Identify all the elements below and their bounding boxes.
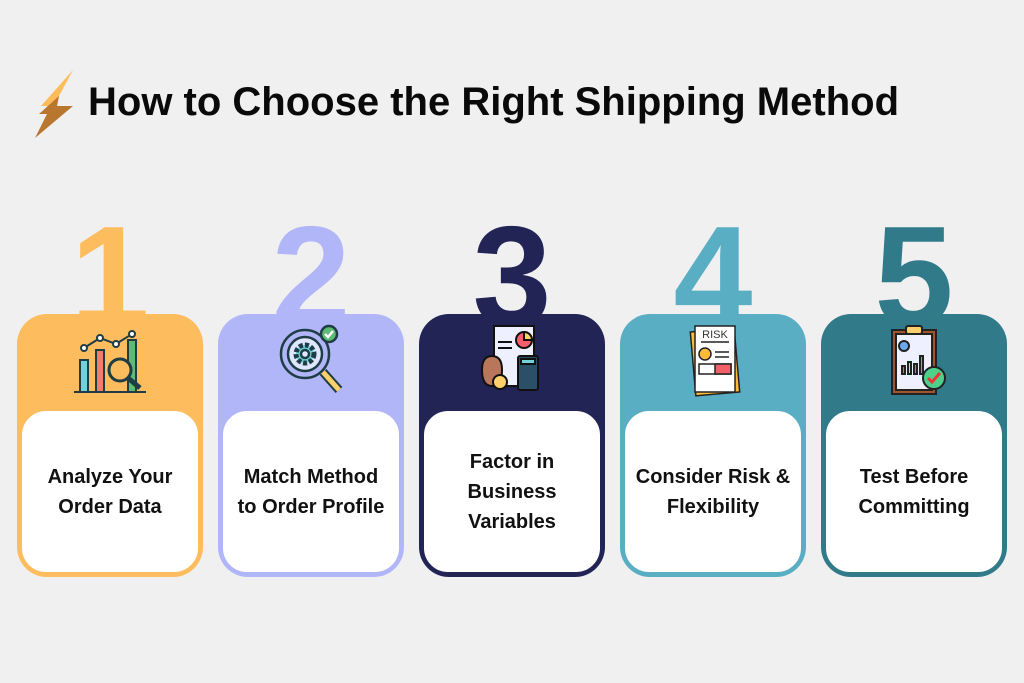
text: step 4: Flexibility: [667, 496, 759, 518]
text: step 1: Order Data: [58, 496, 162, 518]
text: step 1: Analyze Your: [48, 466, 172, 488]
panel: step 2: [218, 314, 404, 577]
text: step 3: Variables: [468, 510, 556, 532]
icon: gear magnifier: [280, 324, 342, 393]
panel: step 5: [821, 314, 1007, 577]
text: step 5: [824, 409, 1004, 574]
text: step 5: Test Before: [860, 466, 968, 488]
icon: risk document: [690, 325, 740, 397]
number 2: 2: [272, 197, 350, 356]
panel: step 4: [620, 314, 806, 577]
text: step 3: [422, 409, 602, 574]
text: step 4: [623, 409, 803, 574]
text: step 1: [20, 409, 200, 574]
text: step 2: to Order Profile: [238, 496, 384, 518]
icon: lightning bolt: [35, 70, 73, 138]
text: step 4: Consider Risk &: [636, 466, 790, 488]
number 4: 4: [674, 197, 752, 356]
text: step 3: Business: [468, 480, 556, 502]
text: step 5: Committing: [858, 496, 970, 518]
icon: risk document: RISK: [702, 329, 728, 341]
icon: chart with magnifier: [74, 330, 146, 393]
number 3: 3: [472, 197, 551, 356]
icon: clipboard with check: [891, 325, 946, 395]
panel: step 3: [419, 314, 605, 577]
text: step 2: Match Method: [244, 466, 378, 488]
text: step 3: Factor in: [470, 450, 554, 472]
title: How to Choose the Right Shipping Method: [88, 80, 899, 124]
number 5: 5: [874, 197, 953, 356]
panel: step 1: [17, 314, 203, 577]
icon: money, document and calculator: [481, 325, 539, 391]
text: step 2: [221, 409, 401, 574]
number 1: 1: [70, 197, 149, 356]
